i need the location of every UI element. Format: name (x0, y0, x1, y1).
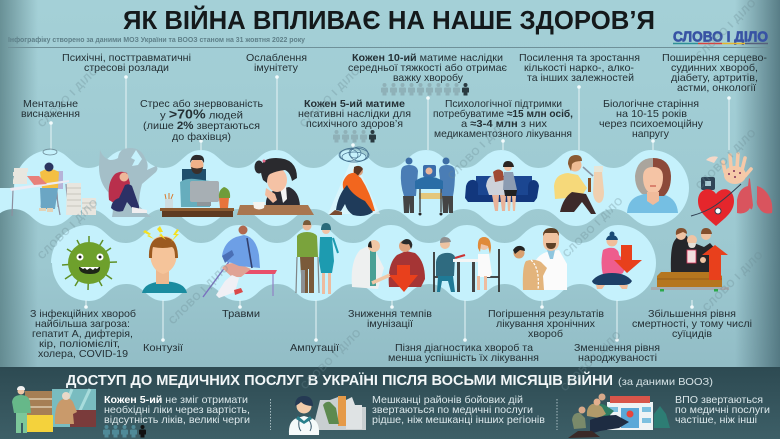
text: biological ageing (599, 99, 704, 140)
icon: man with tangled thoughts (328, 147, 380, 216)
icon: pharmacy (12, 386, 96, 433)
text: displaced persons: ВПО звертаються (675, 395, 763, 406)
pictogram: one in ten (381, 83, 469, 96)
watermarks: СЛОВО І ДІЛО (701, 249, 766, 314)
icon: doctor and patient back (513, 228, 567, 290)
text: birth rate: народжуваності (578, 353, 657, 364)
icon: woman with trauma shadow (99, 148, 158, 217)
icon: doctor and ruined buildings (289, 396, 366, 435)
text: infectious diseases: найбільша загроза: (35, 318, 130, 330)
text: every 5th (298, 99, 411, 130)
text: psychological support (433, 99, 573, 140)
icon: pregnant woman (592, 232, 642, 289)
text: chronic treatment (488, 309, 604, 340)
text: every 10th: Кожен 10-ий матиме наслідки (352, 53, 503, 64)
text: chronic diseases (662, 53, 767, 94)
connector lines and dots (49, 75, 731, 342)
watermarks: СЛОВО І ДІЛО (561, 195, 626, 260)
icon: man with concussion (142, 226, 187, 293)
text: late diagnosis: Пізня діагностика хвороб та (395, 342, 533, 354)
text: biological ageing: напругу (632, 129, 670, 140)
text: psychological support: потребуватиме ≈15 млн осіб, (433, 108, 573, 120)
icon: man with addiction (554, 155, 604, 214)
text: every fifth could not get medicines: необхідні ліки через вартість, (104, 404, 250, 416)
watermarks: СЛОВО І ДІЛО (694, 127, 759, 192)
text: immunization: імунізації (367, 319, 413, 330)
title: ЯК ВІЙНА ВПЛИВАЄ НА НАШЕ ЗДОРОВ’Я (123, 5, 655, 35)
icon: tired woman (237, 158, 314, 215)
text: stress: (лише 2% звертаються (143, 120, 260, 132)
logo: СЛОВО І ДІЛО (673, 30, 768, 46)
text: displaced persons (675, 395, 770, 426)
bottom wave band (51, 225, 656, 301)
text: late diagnosis (388, 342, 539, 364)
text: injuries: Травми (222, 309, 260, 320)
panel heading: ДОСТУП ДО МЕДИЧНИХ ПОСЛУГ В УКРАЇНІ ПІСЛЯ ВОСЬМИ МІСЯЦІВ ВІЙНИ (66, 371, 613, 389)
text: biological ageing: через психоемоційну (599, 119, 704, 130)
icon: displaced family and hospital (568, 394, 670, 438)
text: infectious diseases: гепатит А, дифтерія, (32, 328, 133, 340)
icon: exhausted worker at desk (10, 149, 96, 216)
watermarks: СЛОВО І ДІЛО (559, 329, 624, 394)
text: immunization (348, 309, 432, 330)
icon: amputee and nurse (296, 220, 338, 294)
text: stress: у >70% людей (160, 106, 243, 122)
text: stress: до фахівця) (172, 131, 231, 143)
icon: women on sofa (465, 161, 539, 211)
text: addictions: та інших залежностей (527, 73, 634, 84)
top wave band (0, 150, 689, 226)
text: immunization: Зниження темпів (348, 309, 432, 320)
text: every 10th (348, 53, 508, 84)
icon: wounded man with crutch (203, 226, 277, 298)
watermarks: СЛОВО І ДІЛО (36, 65, 101, 130)
text: mental disorders (62, 53, 191, 74)
text: displaced persons: частіше, ніж інші (675, 415, 757, 426)
text: amputations: Ампутації (290, 343, 339, 354)
text: chronic diseases: Поширення серцево- (662, 53, 767, 64)
source note: Інфографіку створено за даними МОЗ України та ВООЗ станом на 31 жовтня 2022 року (8, 36, 305, 44)
text: chronic diseases: судинних хвороб, (671, 62, 758, 74)
icon: vaccination with arrow (352, 239, 425, 292)
text: every 5th: психічного здоров’я (306, 119, 403, 130)
text: mental disorders: стресові розлади (84, 63, 169, 74)
text: every fifth could not get medicines: Кожен 5-ий не зміг отримати (104, 395, 248, 406)
icon: doctors and patient (401, 158, 455, 216)
text: birth rate: Зменшення рівня (574, 343, 660, 354)
text: biological ageing: на 10-15 років (616, 109, 687, 120)
text: mortality: смертності, у тому числі (632, 319, 752, 330)
watermarks: СЛОВО І ДІЛО (167, 262, 232, 327)
icon: chronic diseases collage (691, 154, 772, 226)
text: displaced persons: по медичні послуги (675, 405, 770, 416)
text: combat area residents: Мешканці районів бойових дій (372, 394, 523, 406)
text: mortality (632, 308, 752, 340)
text: chronic treatment: хвороб (528, 328, 563, 340)
text: chronic diseases: діабету, артритів, (671, 72, 758, 84)
text: every 10th: важку хворобу (393, 72, 464, 84)
text: every 5th: негативні наслідки для (298, 109, 411, 120)
text: weakened immunity: імунітету (254, 63, 299, 74)
text: infectious diseases: кір, поліомієліт, (39, 339, 120, 350)
watermarks: СЛОВО І ДІЛО (36, 197, 101, 262)
text: stress (140, 98, 263, 143)
text: mental disorders: Психічні, посттравматичні (62, 53, 191, 64)
heading source: (за даними ВООЗ) (618, 376, 713, 388)
text: addictions (519, 53, 640, 84)
icon: funeral with rising arrow (651, 228, 729, 292)
text: weakened immunity (246, 52, 307, 74)
text: every 5th: Кожен 5-ий матиме (304, 99, 405, 110)
text: mental exhaustion: виснаження (21, 109, 80, 120)
text: birth rate (574, 343, 660, 364)
text: every fifth could not get medicines (104, 395, 250, 426)
text: addictions: кількості нарко-, алко- (524, 63, 634, 74)
text: chronic diseases: астми, онкології (677, 83, 756, 94)
icon: late diagnosis (434, 237, 499, 292)
panel: access to medical services (0, 367, 780, 439)
text: stress: Стрес або знервованість (140, 98, 263, 110)
text: addictions: Посилення та зростання (519, 53, 640, 64)
text: late diagnosis: менша успішність їх лікування (388, 353, 539, 364)
text: every 10th: середньої тяжкості або отримає (348, 62, 508, 74)
text: psychological support: медикаментозного лікування (434, 129, 572, 140)
icon: virus (62, 236, 117, 290)
text: weakened immunity: Ослаблення (246, 52, 307, 64)
text: infectious diseases: холера, COVID-19 (38, 349, 128, 360)
pictogram: one in five (103, 425, 146, 438)
text: mortality: Збільшення рівня (648, 308, 736, 320)
text: psychological support: а ≈3-4 млн з них (461, 119, 548, 130)
watermarks: СЛОВО І ДІЛО (298, 65, 363, 130)
text: biological ageing: Біологічне старіння (603, 99, 699, 110)
watermarks: СЛОВО І ДІЛО (299, 327, 364, 392)
text: chronic treatment: лікування хронічних (496, 319, 596, 330)
text: mental exhaustion (21, 99, 80, 120)
text: psychological support: Психологічної підтримки (445, 99, 562, 110)
watermarks: СЛОВО І ДІЛО (446, 117, 511, 182)
pictogram: one in five (333, 130, 376, 142)
text: combat area residents: рідше, ніж мешканці інших регіонів (372, 415, 545, 426)
text: every fifth could not get medicines: відсутність ліків, великі черги (104, 415, 250, 426)
text: concussions: Контузії (143, 343, 183, 354)
text: combat area residents: звертаються по медичні послуги (372, 405, 533, 416)
icon: ageing woman (627, 158, 678, 213)
text: infectious diseases (30, 308, 136, 360)
text: mortality: суїцидів (672, 329, 712, 340)
text: infectious diseases: З інфекційних хвороб (30, 308, 136, 320)
icon: stressed man at computer (160, 155, 234, 217)
text: combat area residents (372, 394, 545, 426)
text: chronic treatment: Погіршення результатів (488, 309, 604, 320)
text: mental exhaustion: Ментальне (23, 99, 78, 110)
